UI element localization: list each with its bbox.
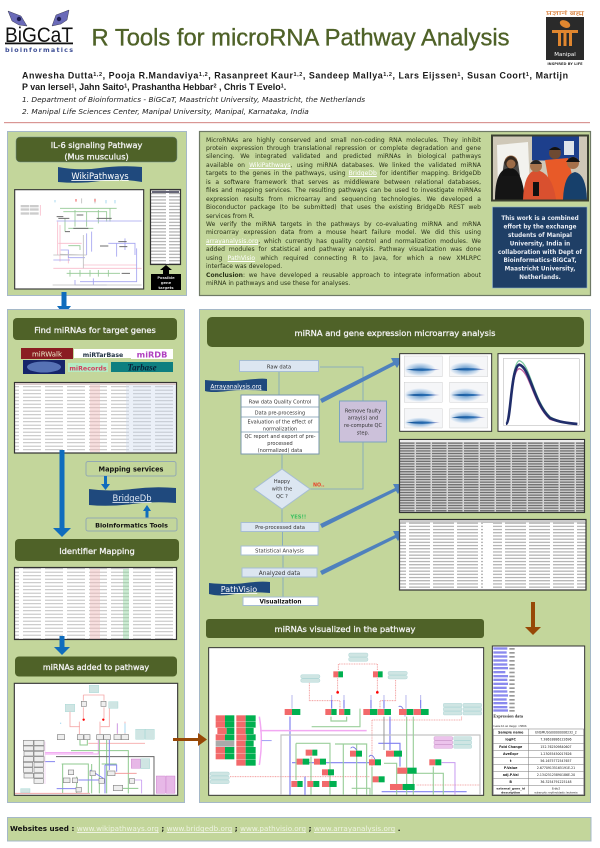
authors and affiliations: 2. Manipal Life Sciences Center, Manipal University, Manipal, Karnataka, India: [22, 107, 309, 116]
figure: pathway visualization: [209, 648, 484, 795]
step: raw data: [240, 360, 318, 372]
text block: abstract: interface was developed.: [206, 263, 282, 270]
label: yes: YES!!: [290, 514, 306, 520]
panel: find miRNAs: [8, 310, 184, 802]
logos: miRNA databases: [21, 348, 173, 374]
authors and affiliations: , Lars Eijssen: [392, 70, 457, 80]
step group: quality control: [241, 395, 319, 454]
figure: node details popup: Sample name: [498, 731, 524, 735]
authors and affiliations: 1: [457, 72, 460, 78]
figure: possible gene targets table: [150, 190, 180, 264]
figure: node details popup: 7.38618886122696: [540, 738, 572, 742]
callout: exchange students: This work is a combined: [501, 216, 579, 222]
arrow: bioinformatics tools up: [143, 505, 151, 518]
figure: node details popup: eukaryotic erythroblastic leukemia: [534, 790, 578, 794]
label: possible gene targets: targets: [158, 286, 174, 290]
authors and affiliations: 2: [213, 84, 216, 90]
text block: abstract: [206, 137, 481, 287]
heading: microarray analysis: [207, 317, 584, 347]
authors and affiliations: , Rasanpreet Kaur: [208, 70, 294, 80]
logo: Manipal: Manipal: [554, 52, 576, 58]
step: pre-processed data: [241, 522, 319, 532]
box: mapping services: Mapping services: [99, 466, 164, 474]
arrow: mapping services down: [101, 476, 110, 490]
callout: exchange students: collaboration with Dept of: [498, 250, 582, 256]
authors and affiliations: P van Iersel: [22, 82, 71, 92]
logos: miRNA databases: miRDB: [137, 350, 167, 360]
heading: miRNAs added: miRNAs added to pathway: [43, 663, 149, 672]
authors and affiliations: 1: [124, 84, 127, 90]
heading: miRNAs visualized: miRNAs visualized in the pathway: [275, 624, 416, 634]
authors and affiliations: [22, 70, 568, 116]
authors and affiliations: , Pooja R.Mandaviya: [103, 70, 198, 80]
authors and affiliations: , Jahn Saito: [74, 82, 125, 92]
banner: Arrayanalysis.org: Arrayanalysis.org: [210, 384, 262, 390]
label: possible gene targets: [151, 274, 181, 290]
logos: miRNA databases: miRecords: [69, 366, 107, 372]
logo: BiGCaT bioinformatics: [5, 10, 73, 54]
figure: IL-6 pathway diagram: [15, 190, 144, 289]
logo: Manipal: INSPIRED BY LIFE: [547, 62, 583, 66]
heading: find miRNAs: Find miRNAs for target genes: [34, 325, 156, 335]
logos: miRNA databases: Tarbase: [127, 362, 157, 372]
text block: abstract: added modules for statistical and pathway analysis. Pathway visualization was done: [206, 246, 481, 253]
step: pre-processed data: Pre-processed data: [255, 525, 305, 531]
step: raw data: Raw data: [267, 364, 291, 370]
figure: node details popup: B: [509, 780, 512, 784]
figure: node details popup: 152.762509840607: [540, 745, 572, 749]
step group: quality control: normalization: [263, 426, 297, 432]
banner: PathVisio: [209, 582, 270, 596]
decision: happy with QC: Happy: [274, 479, 290, 485]
figure: node details popup: logFC: [505, 738, 516, 742]
step group: quality control: Evaluation of the effect of: [248, 420, 313, 426]
banner: WikiPathways: [58, 166, 142, 183]
decision: happy with QC: with the: [272, 486, 292, 492]
figure: node details popup: description: [501, 790, 520, 794]
banner: WikiPathways: WikiPathways: [71, 171, 129, 181]
text block: abstract: files and mapping services. The resulting pathways can be used to investigate miRNAs: [206, 187, 481, 194]
label: possible gene targets: Possible: [157, 276, 175, 280]
title: R Tools for microRNA Pathway Analysis: [92, 24, 510, 52]
text block: abstract: using PathVisio which required connecting R to Java, for which a new XMLRPC: [206, 255, 481, 262]
figure: node details popup: t: [510, 759, 512, 763]
arrow: added pathway to visualized pathway: [173, 733, 207, 746]
callout: exchange students: Maastricht University,: [505, 267, 575, 273]
heading: IL-6 signaling pathway: IL-6 signaling Pathway: [51, 140, 142, 150]
heading: microarray analysis: miRNA and gene expression microarray analysis: [295, 328, 495, 338]
figure: node details popup: 2.67709135165191E-21: [537, 766, 575, 770]
callout: exchange students: students of Manipal: [508, 233, 572, 239]
banner: BridgeDb: [89, 487, 176, 506]
text block: abstract: MicroRNAs are highly conserved and small non-coding RNA molecules. They inhibit: [206, 137, 481, 144]
figure: identifier mapping table: [14, 568, 176, 640]
logos: miRNA databases: miRTarBase: [83, 352, 123, 359]
flowchart: QC workflow: [205, 360, 386, 606]
figure: node details popup: Expression data: [493, 713, 524, 718]
step: remove faulty arrays: re-compute QC: [344, 423, 382, 429]
heading: find miRNAs: [13, 318, 177, 340]
arrow: table to identifier mapping: [53, 450, 71, 537]
text block: abstract: miRNA in pathways and use these for analyses.: [206, 280, 350, 287]
step: statistical analysis: [241, 546, 318, 555]
authors and affiliations: 1,2: [93, 72, 102, 78]
text block: websites used: Websites used : www.wikipathways.org ; www.bridgedb.org ; www.pathvisio.org ; www.arrayanalysis.org .: [10, 824, 400, 833]
figure: node details popup: Gene Id on mapp: 13866: [493, 724, 527, 728]
text block: abstract: available on WikiPathways, using miRNA databases. We linked the validated miRNA: [206, 162, 481, 169]
figure: node details popup: external_gene_id: [496, 787, 525, 791]
authors and affiliations: Anwesha Dutta: [22, 70, 93, 80]
callout: exchange students: Netherlands.: [519, 275, 561, 281]
callout: exchange students: Bioinformatics-BiGCaT,: [503, 258, 577, 264]
panel: abstract: [200, 132, 590, 296]
decision: happy with QC: QC ?: [276, 494, 288, 500]
text block: abstract: silencing. We integrated validated and predicted miRNAs in biological pathways: [206, 153, 481, 160]
authors and affiliations: 1: [526, 72, 529, 78]
text block: abstract: We verify the miRNA targets in the pathways by co-evaluating miRNA and mRNA: [206, 221, 481, 228]
step: remove faulty arrays: Remove faulty: [345, 408, 381, 414]
figure: node details popup: 2.13425125890186E-20: [537, 773, 575, 777]
arrow: mapping to added: [54, 636, 70, 655]
banner: Arrayanalysis.org: [205, 379, 267, 392]
text block: abstract: microarray expression data from a mouse heart failure model. We did this using: [206, 229, 481, 236]
panel: microarray analysis: [200, 310, 590, 802]
heading: miRNAs visualized: [206, 619, 484, 638]
step: analyzed data: Analyzed data: [259, 571, 301, 577]
heading: IL-6 signaling pathway: [16, 137, 177, 162]
text block: abstract: targets to the genes in the pathways, using BridgeDb for identifier mapping. BridgeDb: [206, 170, 481, 177]
authors and affiliations: 1: [71, 84, 74, 90]
figure: node details popup: [492, 646, 585, 795]
figure: node details popup: P.Value: [504, 766, 518, 770]
authors and affiliations: , Sandeep Mallya: [303, 70, 383, 80]
figure: node details popup: 36.3254791225148: [540, 780, 572, 784]
callout: exchange students: University, India in: [510, 241, 570, 247]
figure: results table: [400, 520, 586, 590]
step: visualization: Visualization: [260, 600, 302, 606]
callout: exchange students: effort by the exchange: [503, 224, 577, 230]
authors and affiliations: , Prashantha Hebbar: [127, 82, 214, 92]
step: statistical analysis: Statistical Analysis: [255, 548, 304, 554]
authors and affiliations: , Susan Coort: [461, 70, 525, 80]
label: no: NO..: [313, 482, 325, 488]
logo: BiGCaT bioinformatics: BiGCaT: [5, 24, 73, 47]
photo: students: [491, 134, 589, 202]
heading: miRNAs added: [15, 656, 177, 676]
text block: abstract: protein expression through translational repression or complete degradation and gene: [206, 145, 481, 152]
step: remove faulty arrays: [340, 401, 386, 442]
figure: node details popup: Erbb2: [552, 787, 560, 791]
authors and affiliations: 1,2: [383, 72, 392, 78]
decision: happy with QC: [254, 469, 310, 509]
step group: quality control: Data pre-processing: [255, 410, 305, 416]
banner: BridgeDb: BridgeDb: [112, 493, 152, 503]
figure: node details popup: 1.23055450017626: [540, 752, 572, 756]
box: mapping services: [86, 462, 176, 476]
text block: abstract: expression results from microarray and sequencing technologies. We developed a: [206, 196, 481, 203]
box: bioinformatics tools: Bioinformatics Tools: [95, 522, 168, 530]
heading: IL-6 signaling pathway: (Mus musculus): [64, 152, 129, 162]
arrow: analysis to pathway: [525, 602, 541, 635]
label: possible gene targets: gene: [161, 281, 172, 285]
banner: PathVisio: PathVisio: [221, 585, 257, 594]
text block: abstract: Conclusion: we have developed a reusable approach to integrate information about: [206, 272, 481, 279]
heading: identifier mapping: Identifier Mapping: [59, 546, 135, 556]
figure: node details popup: ENSMUSG00000006232_2: [535, 731, 577, 735]
heading: identifier mapping: [15, 539, 179, 561]
authors and affiliations: , Martijn: [530, 70, 568, 80]
authors and affiliations: 1: [281, 84, 284, 90]
arrow: up to table: [160, 265, 172, 274]
arrow: panel 1 to panel 2: [57, 292, 71, 315]
figure: density plot: [498, 354, 585, 431]
figure: node details popup: AveExpr: [503, 752, 519, 756]
step: remove faulty arrays: step.: [357, 430, 370, 436]
authors and affiliations: , Chris T Evelo: [216, 82, 281, 92]
step: visualization: [243, 597, 318, 606]
step group: quality control: (normalized) data: [258, 448, 302, 454]
figure: node details popup: adj.P.Val: [503, 773, 519, 777]
logo: BiGCaT bioinformatics: bioinformatics: [5, 46, 73, 54]
authors and affiliations: 1,2: [294, 72, 302, 78]
callout: exchange students: [492, 207, 587, 288]
text block: abstract: arrayanalysis.org, which currently has quality control and normalization modules. We: [206, 238, 481, 245]
figure: MA plots: [400, 354, 492, 431]
step group: quality control: processed: [267, 441, 293, 447]
authors and affiliations: 1. Department of Bioinformatics - BiGCaT, Maastricht University, Maastricht, the Netherlands: [22, 95, 365, 104]
authors and affiliations: 1,2: [199, 72, 208, 78]
figure: miRNA target table: [14, 382, 176, 453]
step: remove faulty arrays: array(s) and: [348, 416, 378, 422]
step: analyzed data: [242, 568, 317, 577]
step group: quality control: Raw data Quality Control: [249, 400, 311, 406]
figure: node details popup: 56.1675772547657: [540, 759, 572, 763]
arrow: analyzed to results table: [320, 531, 404, 575]
text block: abstract: Bioconductor package (to be submitted) that uses the existing BridgeDb REST web: [206, 204, 481, 211]
authors and affiliations: .: [284, 82, 286, 92]
figure: pathway with miRNAs: [14, 683, 178, 795]
logo: Manipal: [546, 8, 584, 66]
panel: websites footer: [8, 818, 591, 841]
figure: expression table: [400, 440, 584, 512]
logo: Manipal: प्रज्ञानं ब्रह्म: [546, 8, 584, 17]
text block: abstract: services from R.: [206, 213, 255, 220]
arrow: QC to MA plots: [320, 358, 403, 403]
text block: abstract: is a software framework that serves as middleware between relational databases,: [206, 179, 481, 186]
figure: node details popup: Fold Change: [499, 745, 523, 749]
step group: quality control: QC report and export of pre-: [244, 434, 316, 440]
arrow: pre-processed to expression table: [320, 484, 404, 528]
panel: IL-6 pathway: [8, 132, 186, 296]
logos: miRNA databases: miRWalk: [32, 350, 63, 358]
box: bioinformatics tools: [86, 518, 177, 531]
